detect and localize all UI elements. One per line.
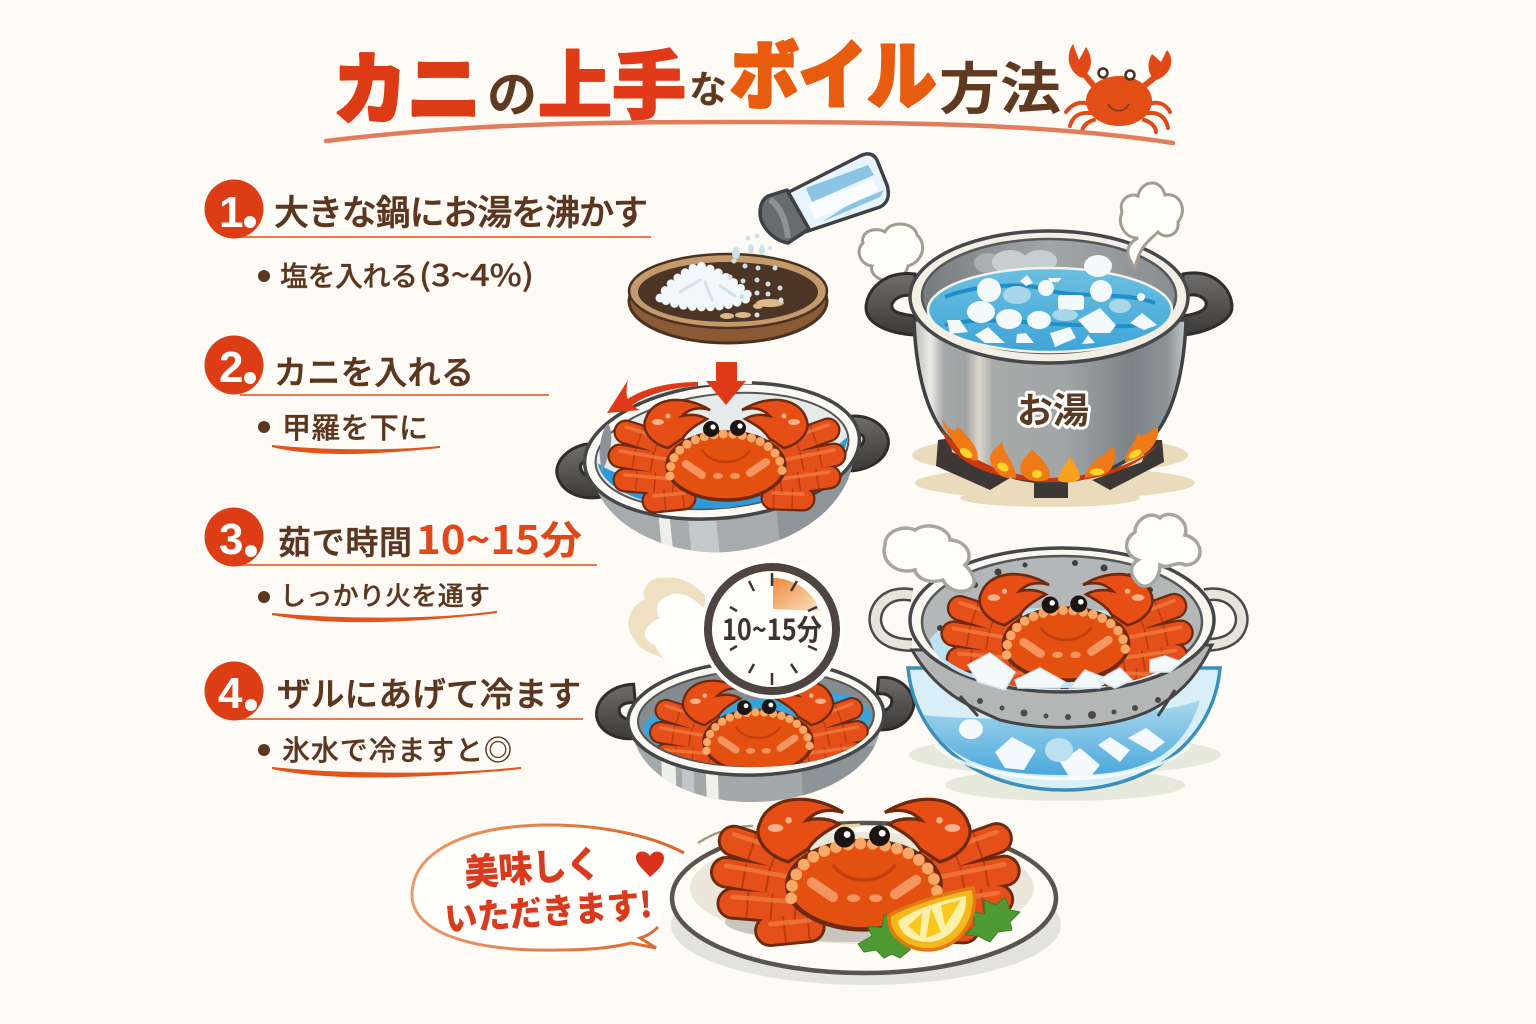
step 1 underline — [240, 236, 651, 238]
icon: pot with clock — [595, 559, 917, 815]
title: ボイル — [730, 17, 936, 124]
step 1 heading: 大きな鍋にお湯を沸かす — [274, 185, 648, 236]
step 3 heading: 茹で時間 — [278, 516, 412, 564]
table shadow — [909, 735, 1221, 801]
step 2 brush underline — [272, 446, 440, 453]
curved arrow — [607, 380, 698, 413]
clock: 10~15分 — [722, 607, 822, 649]
step 3 badge — [204, 508, 264, 566]
gap in rim — [606, 378, 752, 408]
callout text: いただきます! — [443, 877, 654, 942]
step 1 bullet — [258, 251, 534, 295]
title: 方法 — [939, 45, 1061, 126]
step 4 — [204, 662, 583, 777]
step 2 underline — [240, 394, 549, 396]
pot body — [914, 320, 1186, 482]
strainer handles — [875, 594, 1242, 645]
strainer rim — [910, 548, 1214, 692]
rim — [578, 370, 866, 532]
down arrow — [706, 362, 746, 405]
step 4 brush underline — [272, 768, 521, 777]
bubbles and ice — [947, 255, 1157, 347]
step 3 underline — [240, 564, 597, 566]
ground stain — [912, 435, 1195, 507]
step 2 heading: カニを入れる — [274, 346, 474, 394]
crab on plate — [726, 799, 1004, 931]
callout — [412, 825, 684, 950]
icon: plate with crab — [671, 799, 1061, 985]
plate — [672, 823, 1056, 973]
parsley — [858, 897, 1020, 958]
pot label: お湯 — [1017, 382, 1089, 434]
icon: title crab — [1066, 44, 1171, 132]
step 1 bullet: (3~4%) — [419, 251, 534, 295]
stove — [936, 438, 1164, 498]
callout text: 美味しく — [463, 834, 602, 897]
icon: salt plate — [629, 234, 827, 343]
heart — [636, 852, 664, 877]
ice cubes — [968, 653, 1182, 690]
step 2 badge: 2 — [219, 343, 243, 392]
step 4 badge — [204, 662, 264, 720]
body — [598, 465, 852, 552]
glass bowl — [908, 668, 1220, 790]
step 3 — [204, 508, 597, 621]
step 3 brush underline — [272, 612, 497, 621]
title — [333, 17, 1061, 140]
lemon — [889, 888, 975, 950]
callout text — [440, 830, 654, 942]
step 1 bullet: 塩を入れる — [280, 255, 418, 295]
step 2 bullet: 甲羅を下に — [282, 405, 428, 447]
icon: salt shaker — [760, 154, 888, 243]
step 3 time: 10~15分 — [416, 510, 582, 566]
strainer body — [912, 645, 1212, 727]
step 4 underline — [240, 718, 583, 720]
step 4 heading: ザルにあげて冷ます — [277, 667, 581, 716]
rim — [626, 657, 886, 779]
handles — [554, 443, 604, 502]
title underline — [326, 122, 1173, 143]
title: の — [487, 55, 537, 127]
icon: pot with crab — [555, 362, 890, 552]
icon: bowl and strainer — [875, 548, 1242, 801]
step 4 bullet: 氷水で冷ますと◎ — [282, 729, 512, 769]
clock — [700, 559, 844, 699]
icon: steam left of strainer — [884, 526, 974, 591]
step 1 badge: 1 — [219, 188, 243, 237]
plate shadow — [671, 865, 1061, 985]
steam shadows inside pot — [974, 250, 1057, 274]
flames — [941, 418, 1162, 482]
icon: boiling pot — [866, 231, 1232, 507]
water — [928, 268, 1172, 352]
crab in pot — [660, 681, 857, 774]
crab in strainer — [954, 574, 1180, 681]
title: な — [689, 59, 727, 114]
step 3 bullet: しっかり火を通す — [280, 576, 490, 613]
step 1 — [204, 180, 651, 295]
title: 上手 — [538, 27, 686, 134]
handles — [596, 684, 637, 740]
speech tail line — [698, 826, 753, 843]
step 4 badge: 4 — [218, 669, 243, 718]
icon: steam right of boiling pot — [1120, 183, 1182, 268]
step 2 — [204, 336, 549, 453]
icon: steam right of strainer — [1127, 514, 1200, 586]
body — [634, 732, 880, 802]
step 2 badge — [204, 336, 264, 394]
icon: steam left of boiling pot — [859, 224, 923, 281]
pot handles — [866, 273, 1232, 335]
title: カニ — [333, 28, 481, 140]
steam behind clock — [628, 577, 710, 690]
crab — [620, 400, 834, 501]
step 1 badge — [204, 180, 264, 238]
step 3 badge: 3 — [219, 515, 243, 564]
pot rim — [910, 231, 1188, 363]
